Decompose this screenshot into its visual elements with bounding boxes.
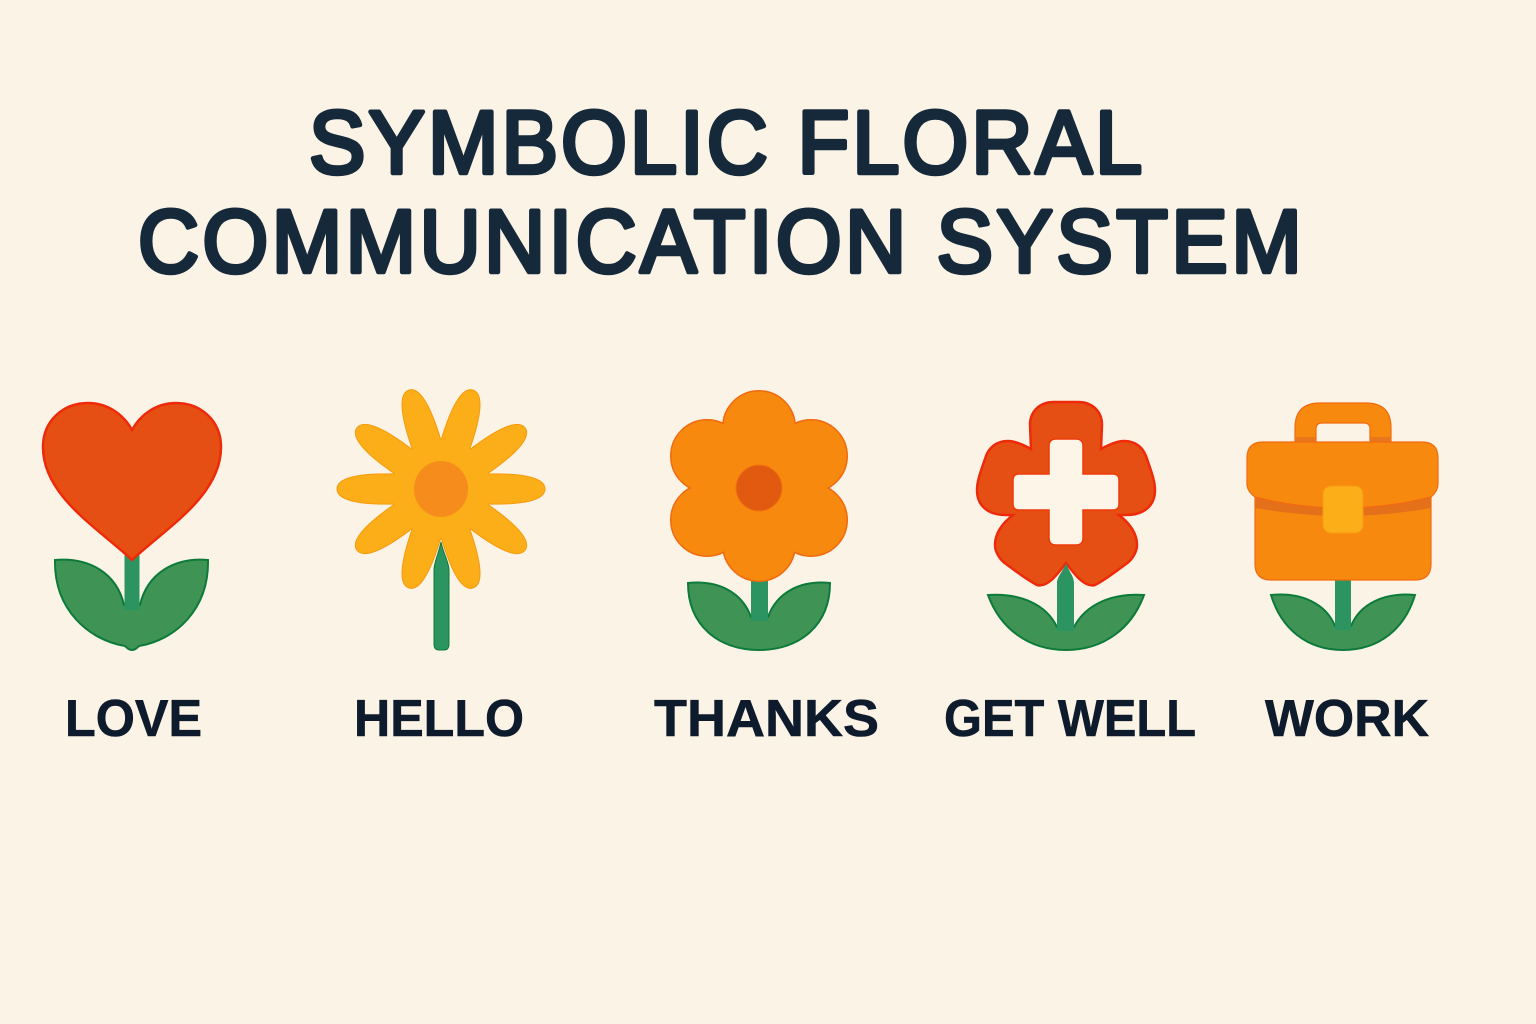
title: SYMBOLIC FLORAL (309, 93, 1142, 192)
labels (65, 690, 1429, 748)
icon: work briefcase flower (1247, 403, 1438, 650)
briefcase flap (1247, 442, 1438, 508)
icon: love heart flower (43, 403, 221, 650)
briefcase handle (1295, 403, 1391, 442)
icon: white cross (1013, 439, 1119, 545)
label: hello: HELLO (354, 690, 524, 748)
icon: hello daisy flower (337, 385, 545, 650)
briefcase clasp (1323, 486, 1363, 533)
label: work: WORK (1265, 690, 1429, 748)
briefcase flap shadow (1255, 497, 1431, 516)
title: COMMUNICATION SYSTEM (138, 192, 1302, 291)
briefcase body (1255, 490, 1431, 580)
label: love: LOVE (65, 690, 202, 748)
title (138, 93, 1302, 291)
icon: thanks flower (671, 391, 847, 650)
icon: get well flower with cross (977, 402, 1155, 650)
label: get well: GET WELL (944, 690, 1196, 748)
label: thanks: THANKS (654, 690, 879, 748)
